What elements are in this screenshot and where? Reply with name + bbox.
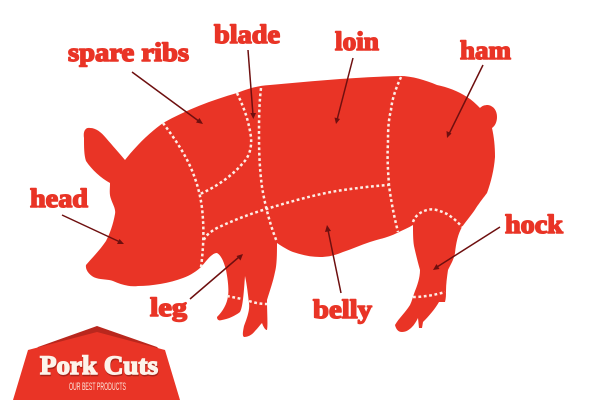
dashed cut lines [163, 77, 462, 304]
arrow: loin [334, 58, 353, 124]
arrow: leg [190, 254, 243, 299]
badge roof [35, 326, 160, 350]
arrow: blade [248, 50, 256, 119]
label: loin: loin [335, 27, 380, 56]
arrow: head [62, 215, 124, 244]
badge: Pork Cuts [13, 326, 180, 400]
label: blade: blade [214, 20, 280, 49]
label: hock: hock [505, 210, 564, 239]
badge body [13, 332, 180, 400]
label: head: head [30, 184, 89, 213]
arrow: ham [446, 65, 483, 138]
label: spare ribs: spare ribs [68, 38, 189, 67]
badge: Pork Cuts: OUR BEST PRODUCTS [69, 381, 126, 393]
arrow: hock [433, 227, 500, 270]
pig diagram [84, 76, 497, 337]
badge title: Pork Cuts [40, 351, 158, 380]
badge title shadow: Pork Cuts [40, 352, 158, 382]
label: ham: ham [460, 36, 511, 65]
arrow: belly [325, 225, 341, 293]
pig silhouette [84, 76, 497, 337]
label: leg: leg [150, 293, 187, 322]
label: belly: belly [313, 295, 372, 324]
arrow: spare ribs [132, 72, 203, 124]
